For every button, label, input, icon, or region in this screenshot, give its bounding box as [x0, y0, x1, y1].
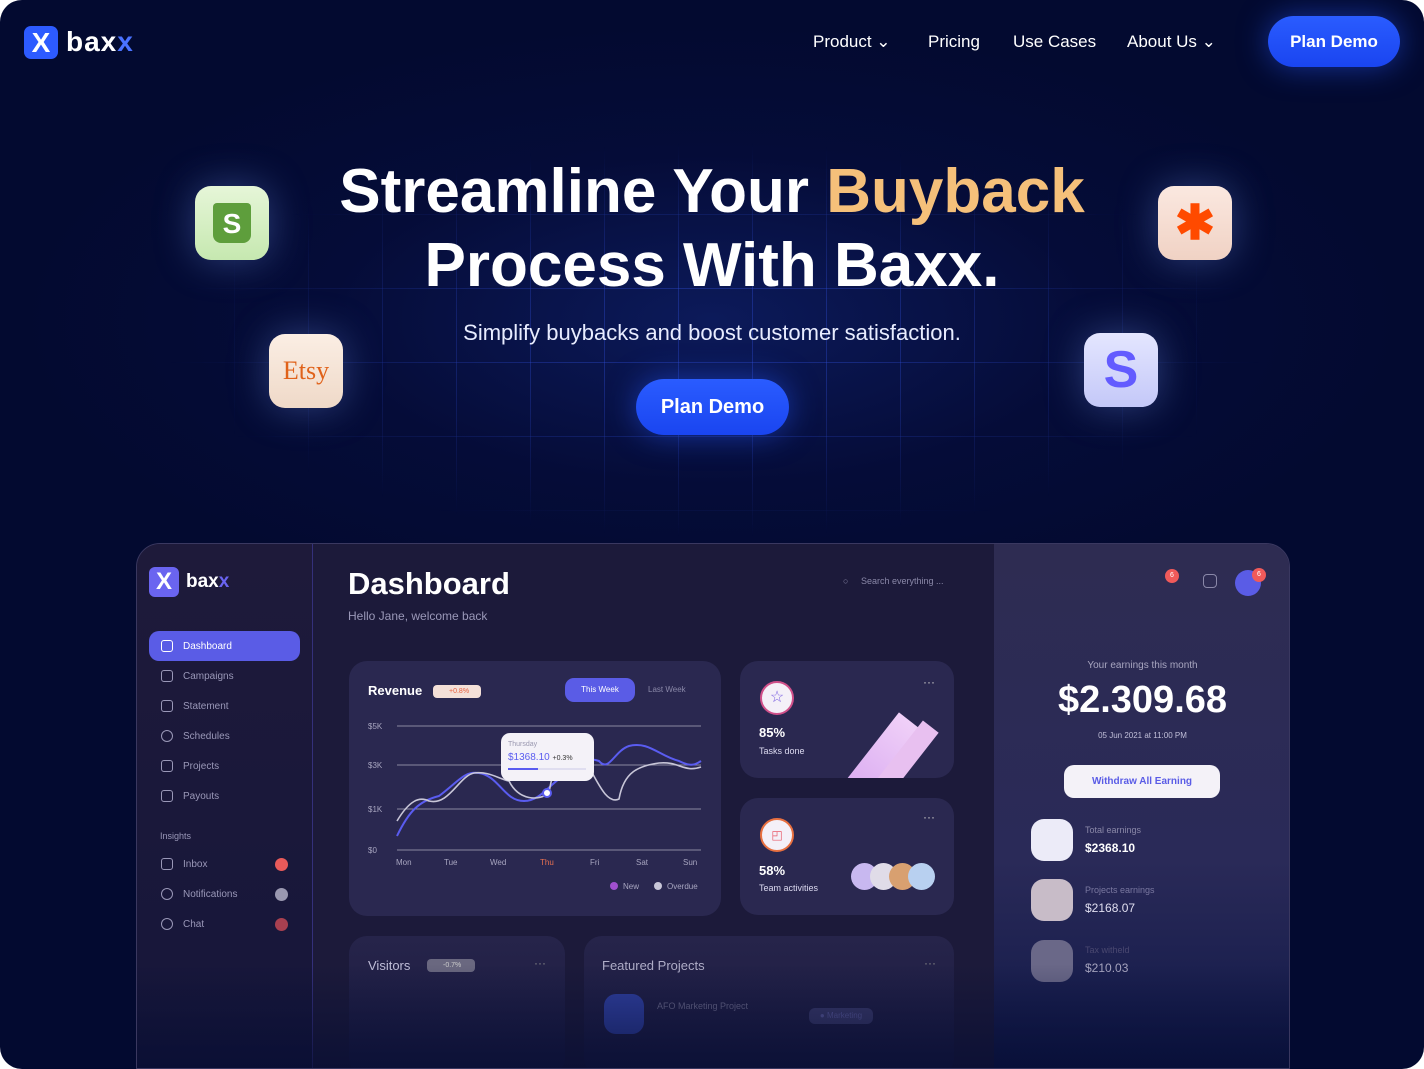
- card: featured projects: AFO Marketing Project: [657, 1001, 748, 1011]
- chart: revenue: Last Week: [648, 685, 686, 694]
- icon: stripe: S: [1104, 341, 1138, 399]
- card: team activities: ···: [923, 810, 935, 824]
- chart: revenue: New: [623, 882, 639, 891]
- panel: dashboard mockup: Hello Jane, welcome back: [348, 609, 487, 623]
- panel: dashboard mockup: [136, 543, 1290, 1069]
- card: tasks done: ···: [923, 675, 935, 689]
- chart: revenue: Fri: [590, 858, 600, 867]
- card: team activities: 58%: [759, 863, 785, 878]
- card: team activities: [740, 798, 954, 915]
- sidebar: [137, 544, 313, 1069]
- icon: etsy: Etsy: [283, 356, 329, 385]
- sidebar: Notifications: [183, 888, 237, 900]
- icon: stripe: [1084, 333, 1158, 407]
- chart: revenue: $1K: [368, 805, 383, 814]
- panel: earnings: Total earnings: [1085, 825, 1141, 835]
- card: tasks done: Tasks done: [759, 746, 805, 756]
- sidebar: Campaigns: [183, 670, 234, 682]
- chart: revenue: $3K: [368, 761, 383, 770]
- title: [339, 157, 1085, 300]
- card: tasks done: 85%: [759, 725, 785, 740]
- panel: dashboard mockup: ○ Search everything ...: [843, 576, 943, 586]
- sidebar: Projects: [183, 760, 219, 772]
- panel: earnings: Tax witheld: [1085, 945, 1130, 955]
- panel: earnings: $2.309.68: [1058, 679, 1227, 721]
- panel: earnings: Projects earnings: [1085, 885, 1155, 895]
- sidebar: baxx: [186, 571, 229, 592]
- panel: earnings: 6: [1170, 572, 1174, 579]
- logo: X: [32, 26, 50, 58]
- text: Pricing: [928, 32, 980, 51]
- card: visitors: [349, 936, 565, 1069]
- chart: revenue: Mon: [396, 858, 412, 867]
- icon: shopify: S: [223, 208, 241, 239]
- chart: revenue: Revenue: [368, 683, 422, 698]
- chart: revenue: Overdue: [667, 882, 698, 891]
- tooltip: Thursday: [508, 741, 537, 748]
- chart: revenue: Sat: [636, 858, 649, 867]
- subtitle: Simplify buybacks and boost customer satisfaction.: [463, 320, 961, 345]
- sidebar: Insights: [160, 831, 191, 841]
- sidebar: Payouts: [183, 790, 219, 802]
- icon: zapier: ✱: [1175, 197, 1215, 250]
- chart: revenue: Tue: [444, 858, 458, 867]
- heading: Dashboard: Dashboard: [348, 566, 510, 601]
- panel: earnings: Your earnings this month: [1087, 660, 1198, 671]
- card: featured projects: ···: [924, 956, 936, 970]
- hero button: [636, 379, 789, 435]
- hero button: Plan Demo: [661, 396, 764, 418]
- panel: earnings: $210.03: [1085, 961, 1128, 975]
- panel: earnings: $2168.07: [1085, 901, 1135, 915]
- logo: [24, 26, 134, 59]
- card: visitors: ···: [534, 956, 546, 970]
- chart: revenue: $5K: [368, 722, 383, 731]
- card: visitors: -0.7%: [443, 962, 461, 969]
- nav button: Plan Demo: Plan Demo: [1290, 32, 1378, 51]
- card: team activities: Team activities: [759, 883, 818, 893]
- sidebar: Statement: [183, 700, 229, 712]
- title: Streamline Your Buyback: [339, 157, 1085, 226]
- panel: earnings: 05 Jun 2021 at 11:00 PM: [1098, 731, 1187, 740]
- panel: earnings: $2368.10: [1085, 841, 1135, 855]
- chart: revenue: This Week: [581, 685, 619, 694]
- chart: revenue: [349, 661, 721, 916]
- navigation: [813, 32, 1216, 51]
- chart: revenue: Wed: [490, 858, 506, 867]
- sidebar: X: [156, 568, 172, 595]
- icon: zapier: [1158, 186, 1232, 260]
- panel: earnings: 6: [1257, 571, 1261, 578]
- card: visitors: Visitors: [368, 958, 410, 973]
- chart: revenue: Thu: [540, 858, 554, 867]
- logo: baxx: [66, 26, 134, 57]
- card: tasks done: ☆: [770, 689, 784, 706]
- chart: revenue: $0: [368, 846, 377, 855]
- card: tasks done: [740, 661, 954, 778]
- chart: revenue: Sun: [683, 858, 697, 867]
- icon: shopify: [195, 186, 269, 260]
- card: team activities: ◰: [771, 828, 783, 842]
- card: featured projects: [584, 936, 954, 1069]
- tooltip: $1368.10 +0.3%: [508, 752, 573, 763]
- panel: earnings: Withdraw All Earning: [1092, 776, 1192, 787]
- card: featured projects: Featured Projects: [602, 958, 705, 973]
- icon: etsy: [269, 334, 343, 408]
- text: About Us ⌄: [1127, 32, 1216, 51]
- nav button: Plan Demo: [1268, 16, 1400, 67]
- sidebar: Schedules: [183, 730, 230, 742]
- chart: revenue: +0.8%: [449, 688, 469, 695]
- text: Use Cases: [1013, 32, 1096, 51]
- title: Process With Baxx.: [425, 231, 999, 300]
- sidebar: Inbox: [183, 858, 207, 870]
- card: featured projects: ● Marketing: [820, 1011, 862, 1020]
- panel: earnings: [994, 544, 1291, 1069]
- sidebar: Chat: [183, 918, 204, 930]
- sidebar: Dashboard: [183, 640, 232, 652]
- tooltip: [501, 733, 594, 781]
- text: Product ⌄: [813, 32, 891, 51]
